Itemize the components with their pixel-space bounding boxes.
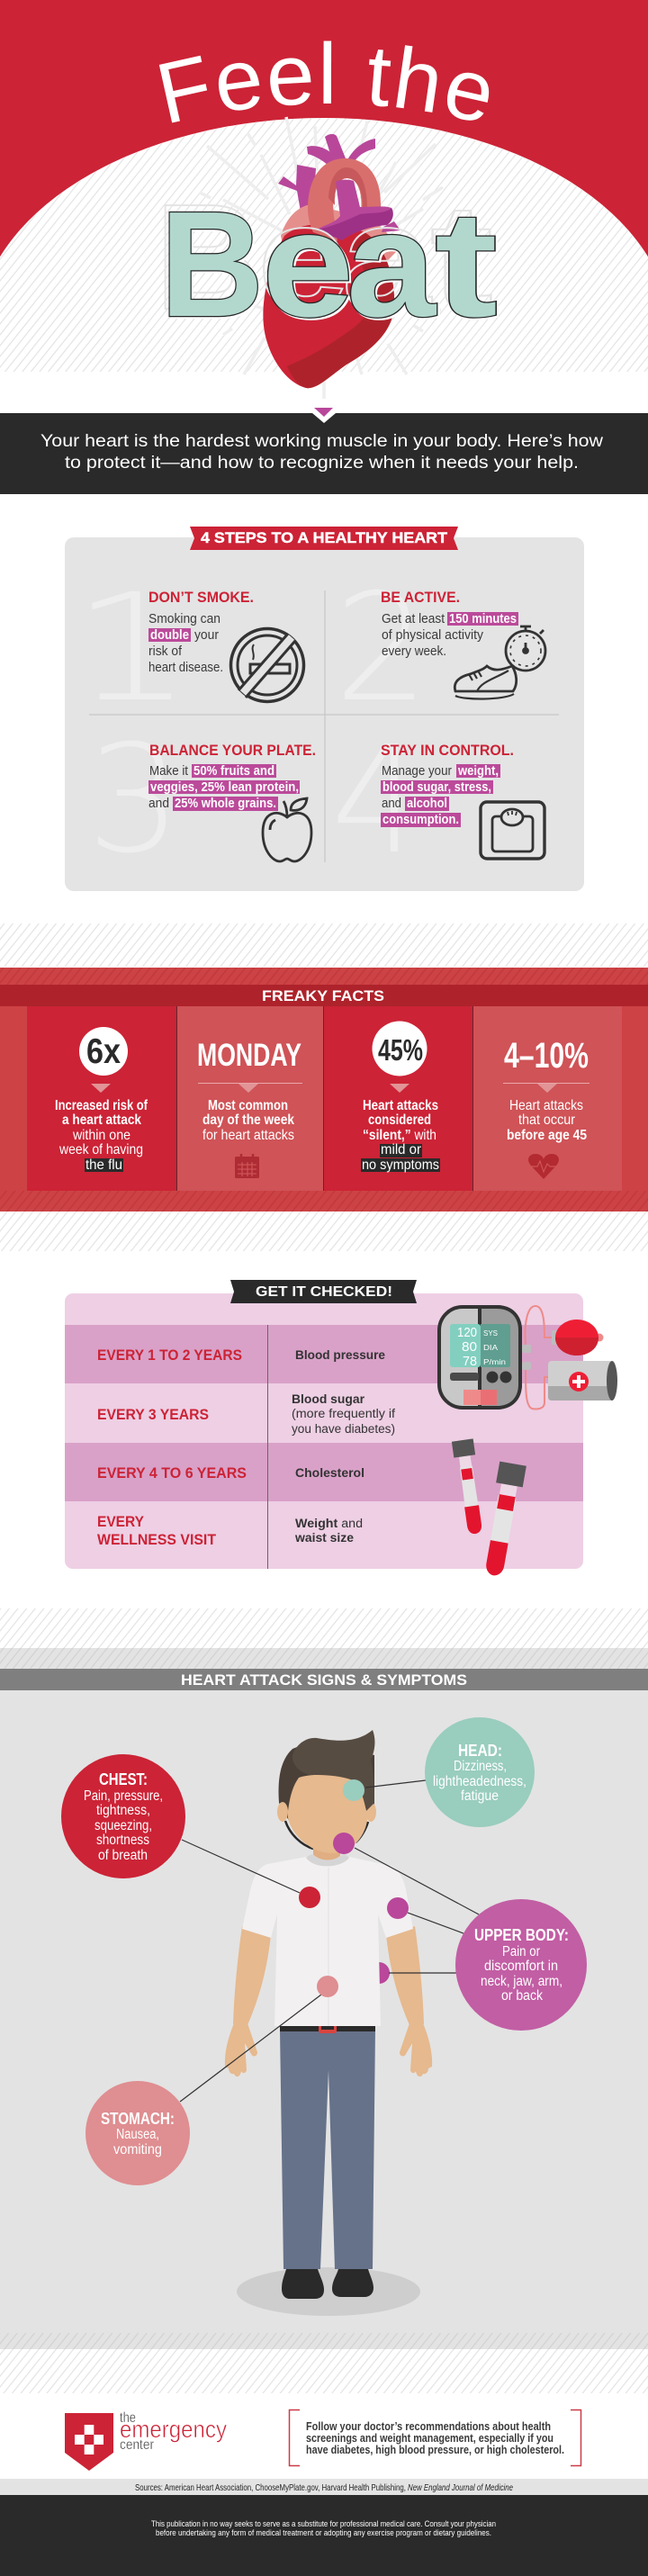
row: every wellness visit: WELLNESS VISIT [97, 1532, 216, 1548]
step 1: don't smoke: 1 [71, 562, 194, 734]
step 2: be active: BE ACTIVE. [381, 590, 460, 606]
pulmonary artery [317, 180, 392, 240]
row: every 1 to 2 years: EVERY 1 TO 2 YEARS [97, 1347, 242, 1364]
callout: stomach [86, 2081, 190, 2185]
figure neck [313, 1836, 340, 1860]
fact: 6x [27, 1006, 176, 1191]
title: Beat: B [160, 181, 264, 348]
intro text: Your heart is the hardest working muscle in your body. Here’s how [40, 432, 603, 451]
figure: person [225, 1730, 432, 2316]
hatch band above symptoms [0, 1608, 648, 1648]
title: Beat: t [436, 183, 500, 350]
step 4: stay in control: 4 [331, 714, 425, 887]
title: Beat: a [348, 183, 438, 350]
callout: chest: shortness [96, 1833, 149, 1848]
title: Beat: B [162, 183, 266, 350]
callout: chest: Pain, pressure, [84, 1788, 163, 1804]
sources band [0, 2479, 648, 2495]
step 4: stay in control: weight, [457, 764, 499, 779]
icon: blood pressure monitor: P/min [483, 1358, 506, 1366]
panel: heart attack signs and symptoms [0, 1648, 648, 2349]
figure left arm [225, 1926, 271, 2076]
icon: calendar [235, 1154, 259, 1178]
step 2: be active: Get at least [382, 612, 445, 626]
figure shirt [242, 1857, 413, 2026]
row: every wellness visit: waist size [294, 1531, 355, 1545]
icon: blood pressure monitor: 120 [457, 1325, 477, 1340]
step 4: stay in control: Manage your [382, 764, 452, 779]
step 2: be active [335, 562, 545, 734]
figure shadow [237, 2267, 420, 2316]
icon: blood pressure monitor: SYS [483, 1329, 498, 1338]
step 4: stay in control [331, 714, 544, 887]
callout: head: HEAD: [458, 1742, 502, 1760]
row: every wellness visit: Weight and [295, 1517, 363, 1530]
callout: doctor's recommendations [290, 2410, 581, 2466]
row: every 4 to 6 years: Cholesterol [295, 1466, 364, 1480]
icon: stopwatch and shoe [454, 626, 545, 699]
fact: 45%: Heart attacks [363, 1098, 438, 1113]
row: every 4 to 6 years: EVERY 4 TO 6 YEARS [97, 1465, 247, 1482]
fact: 6x: a heart attack [62, 1112, 141, 1128]
step 3: balance your plate: 50% fruits and [194, 764, 274, 779]
callout: doctor's recommendations: screenings and weight management, especially if you [306, 2431, 554, 2445]
row: every wellness visit: EVERY [97, 1514, 144, 1530]
hatch band below symptoms [0, 2349, 648, 2393]
callout: upper body: neck, jaw, arm, [481, 1974, 562, 1989]
screening rows [65, 1325, 583, 1569]
fact: monday: for heart attacks [202, 1128, 294, 1143]
figure belt [280, 2026, 375, 2033]
callout: chest: squeezing, [94, 1818, 152, 1833]
icon: no smoking [230, 628, 304, 702]
row: every 1 to 2 years: Blood pressure [295, 1348, 385, 1362]
step 4: stay in control: and [382, 797, 401, 811]
fact: monday [176, 1006, 324, 1191]
figure legs [280, 2030, 375, 2269]
callout: upper body: UPPER BODY: [474, 1926, 569, 1944]
title: Beat: t [430, 174, 493, 341]
fact: 6x: the flu [86, 1157, 122, 1173]
pointer triangle [312, 408, 336, 423]
heart upper chamber [281, 204, 398, 270]
step 1: don't smoke: Smoking can [148, 612, 220, 626]
intro text: to protect it—and how to recognize when it needs your help. [65, 454, 579, 473]
icon: apple [263, 798, 311, 861]
icon: heart with pulse [527, 1154, 560, 1179]
row: every 3 years: (more frequently if [292, 1407, 395, 1420]
step 1: don't smoke: heart disease. [148, 661, 223, 675]
fact number circle: 6x [86, 1032, 121, 1071]
callout: stomach: vomiting [113, 2142, 162, 2157]
icon: test tube right [480, 1462, 526, 1578]
figure shoes [282, 2269, 374, 2299]
disclaimer footer: This publication in no way seeks to serve as a substitute for professional medical care. Consult your physician [151, 2519, 496, 2529]
fact: 4-10%: before age 45 [507, 1128, 587, 1143]
title: Feel the: Feel the [158, 41, 490, 122]
title: Beat: t [435, 181, 498, 348]
row: every 1 to 2 years [97, 1347, 385, 1364]
title: Beat: a [342, 174, 432, 341]
title: Beat: a [346, 181, 436, 348]
sources band: Sources: American Heart Association, ChooseMyPlate.gov, Harvard Health Publishing, New England Journal of Medicine [135, 2482, 513, 2493]
logo wordmark: center [120, 2437, 155, 2453]
fact number circle [79, 1027, 128, 1076]
heart rays [200, 117, 443, 399]
step 1: don't smoke [71, 562, 304, 734]
row: every wellness visit [97, 1514, 363, 1548]
hatch band below facts [0, 1211, 648, 1251]
callout: chest: tightness, [96, 1803, 150, 1818]
callout: upper body [455, 1899, 587, 2031]
callout: head [425, 1717, 535, 1827]
row: every 3 years: Blood sugar [292, 1392, 365, 1406]
banner heading: 4 STEPS TO A HEALTHY HEART [201, 529, 448, 546]
step 3: balance your plate [87, 713, 316, 886]
fact: 45%: mild or [381, 1142, 422, 1157]
bulb [552, 1320, 603, 1356]
callout: chest: of breath [98, 1848, 148, 1863]
step 3: balance your plate: and [148, 797, 169, 811]
fact: 4-10% [473, 1006, 622, 1191]
callout: head: lightheadedness, [433, 1774, 526, 1789]
step 4: stay in control: alcohol [407, 797, 447, 811]
title: Beat: e [257, 174, 349, 341]
fact: monday: MONDAY [197, 1038, 302, 1073]
row: every 4 to 6 years [97, 1465, 364, 1482]
hatch band above facts [0, 923, 648, 967]
icon: scale [481, 802, 544, 859]
intro band [0, 408, 648, 494]
fact: 45%: “silent,” with [363, 1128, 436, 1143]
heart body [263, 224, 394, 388]
banner: get it checked: GET IT CHECKED! [256, 1284, 392, 1300]
panel: freaky facts [0, 968, 648, 1211]
symptoms heading: HEART ATTACK SIGNS & SYMPTOMS [181, 1672, 467, 1689]
logo wordmark: the [120, 2410, 136, 2426]
figure hair back [279, 1742, 374, 1827]
cuff [548, 1361, 617, 1401]
step 1: don't smoke: double [150, 628, 189, 643]
logo shield [65, 2413, 113, 2471]
step 2: be active: every week. [382, 644, 446, 659]
step 3: balance your plate: 3 [87, 713, 181, 886]
title: Beat: B [156, 174, 259, 341]
step 3: balance your plate: 25% whole grains. [175, 797, 276, 811]
symptoms heading [0, 1669, 648, 1690]
step 4: stay in control: consumption. [382, 813, 459, 827]
title: Beat: e [264, 183, 356, 350]
figure hair [292, 1730, 374, 1811]
step 2: be active: 150 minutes [449, 612, 517, 626]
disclaimer footer: before undertaking any form of medical treatment or adopting any exercise program or dietary guidelines. [156, 2528, 491, 2538]
step 4: stay in control: blood sugar, stress, [382, 780, 491, 795]
fact percent circle: 45% [378, 1033, 423, 1067]
fact: 4-10%: Heart attacks [509, 1098, 583, 1113]
fact: 45% [324, 1006, 472, 1191]
step 3: balance your plate: veggies, 25% lean protein, [150, 780, 299, 795]
facts heading: FREAKY FACTS [262, 988, 384, 1004]
figure beard line [285, 1821, 368, 1849]
fact: 4-10%: that occur [518, 1112, 576, 1128]
callout: upper body: discomfort in [484, 1959, 558, 1974]
panel: 4 steps to a healthy heart [65, 527, 584, 891]
heart shadow side [287, 232, 394, 388]
step 4: stay in control: STAY IN CONTROL. [381, 743, 514, 759]
row: every 3 years [97, 1392, 395, 1436]
intro text [40, 432, 603, 473]
disclaimer footer [0, 2495, 648, 2576]
facts heading [0, 985, 648, 1006]
step 3: balance your plate: BALANCE YOUR PLATE. [149, 743, 316, 759]
step 2: be active: of physical activity [382, 628, 484, 643]
callout: chest [61, 1754, 185, 1878]
fact: 6x: within one [72, 1128, 130, 1143]
figure ears [277, 1802, 376, 1822]
connector lines [180, 1780, 479, 2102]
fact: 6x: Increased risk of [55, 1098, 148, 1113]
callout: head: Dizziness, [454, 1759, 507, 1774]
fact: 45%: considered [368, 1112, 431, 1128]
pain dot: arm [368, 1962, 390, 1984]
fact percent circle [373, 1021, 427, 1076]
title: Beat [156, 174, 500, 350]
callout: chest: CHEST: [99, 1770, 148, 1788]
step 1: don't smoke: DON’T SMOKE. [148, 590, 254, 606]
icon: test tube left [452, 1438, 486, 1536]
callout: upper body: Pain or [502, 1944, 540, 1959]
icon: blood pressure monitor: 78 [463, 1354, 477, 1369]
pain dots [299, 1779, 409, 1997]
figure collar [306, 1854, 349, 1866]
row: every 3 years: EVERY 3 YEARS [97, 1407, 209, 1423]
fact: 6x: week of having [58, 1142, 143, 1157]
panel: get it checked [65, 1280, 617, 1578]
heart vessels [278, 134, 375, 212]
fact: 45%: no symptoms [362, 1157, 439, 1173]
banner: get it checked [230, 1280, 417, 1303]
callout: head: fatigue [461, 1788, 499, 1804]
figure right arm [386, 1926, 432, 2076]
fact: monday: day of the week [202, 1112, 294, 1128]
callout: doctor's recommendations: Follow your doctor’s recommendations about health [306, 2419, 551, 2433]
callout: stomach: Nausea, [116, 2127, 159, 2142]
step 2: be active: 2 [335, 562, 428, 734]
fact: monday: Most common [208, 1098, 288, 1113]
step 1: don't smoke: risk of [148, 644, 183, 659]
step 3: balance your plate: Make it [149, 764, 188, 779]
logo wordmark [120, 2410, 227, 2453]
callout: doctor's recommendations: have diabetes, high blood pressure, or high cholesterol. [306, 2443, 564, 2456]
illustration: anatomical heart [263, 134, 400, 388]
callout: upper body: or back [501, 1988, 543, 2004]
aortic arch [308, 158, 381, 241]
logo: the emergency center [65, 2410, 227, 2471]
callout: stomach: STOMACH: [101, 2110, 175, 2128]
step 1: don't smoke: your [194, 628, 219, 643]
icon: blood pressure monitor: DIA [483, 1344, 499, 1352]
row: every 3 years: you have diabetes) [292, 1422, 395, 1436]
header background [0, 0, 648, 372]
fact: 4-10%: 4–10% [504, 1036, 589, 1076]
icon: blood pressure monitor: 80 [462, 1339, 477, 1355]
logo wordmark: emergency [120, 2416, 227, 2443]
figure face [288, 1775, 367, 1853]
icon: blood pressure monitor [439, 1306, 617, 1409]
title: Beat: e [262, 181, 354, 348]
banner heading [190, 527, 458, 550]
